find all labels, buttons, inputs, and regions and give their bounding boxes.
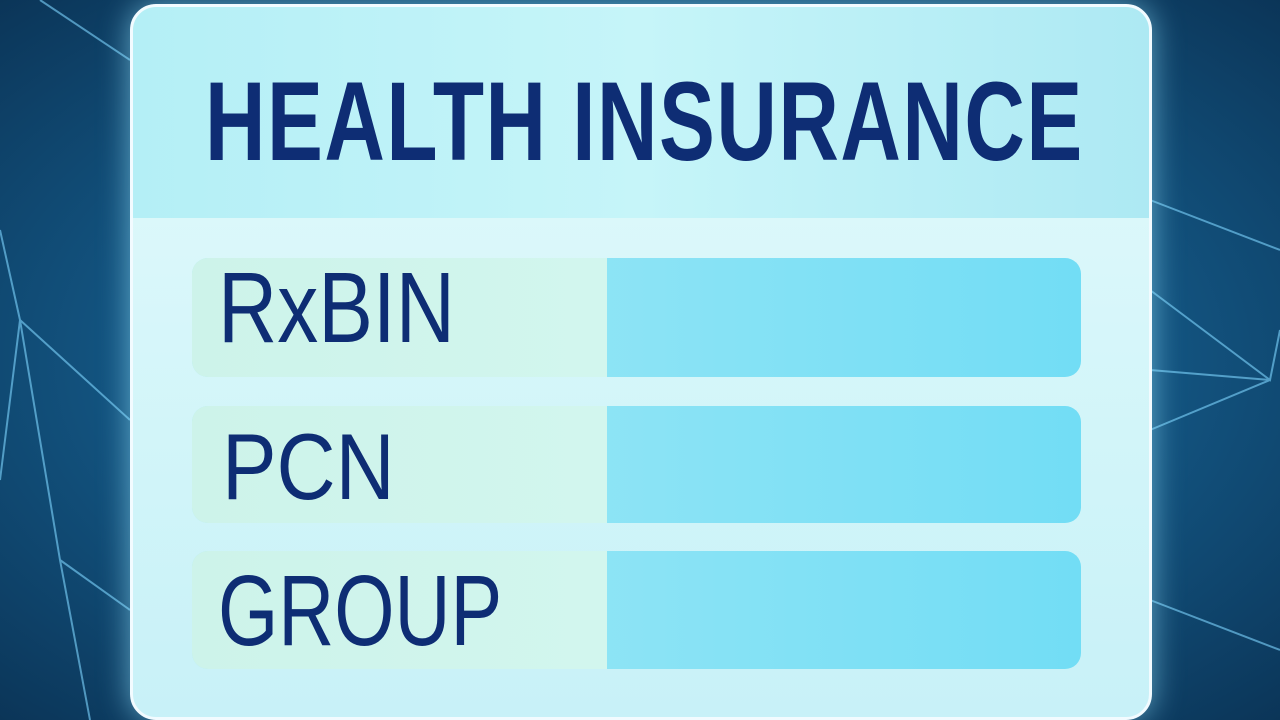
header band (133, 7, 1149, 218)
title: HEALTH INSURANCE (205, 59, 1084, 184)
row: RxBIN (192, 258, 1081, 377)
label: GROUP: GROUP (218, 555, 502, 667)
panel: insurance card (130, 4, 1152, 720)
label: PCN: PCN (222, 414, 395, 519)
row: PCN (192, 406, 1081, 523)
row: GROUP (192, 551, 1081, 669)
